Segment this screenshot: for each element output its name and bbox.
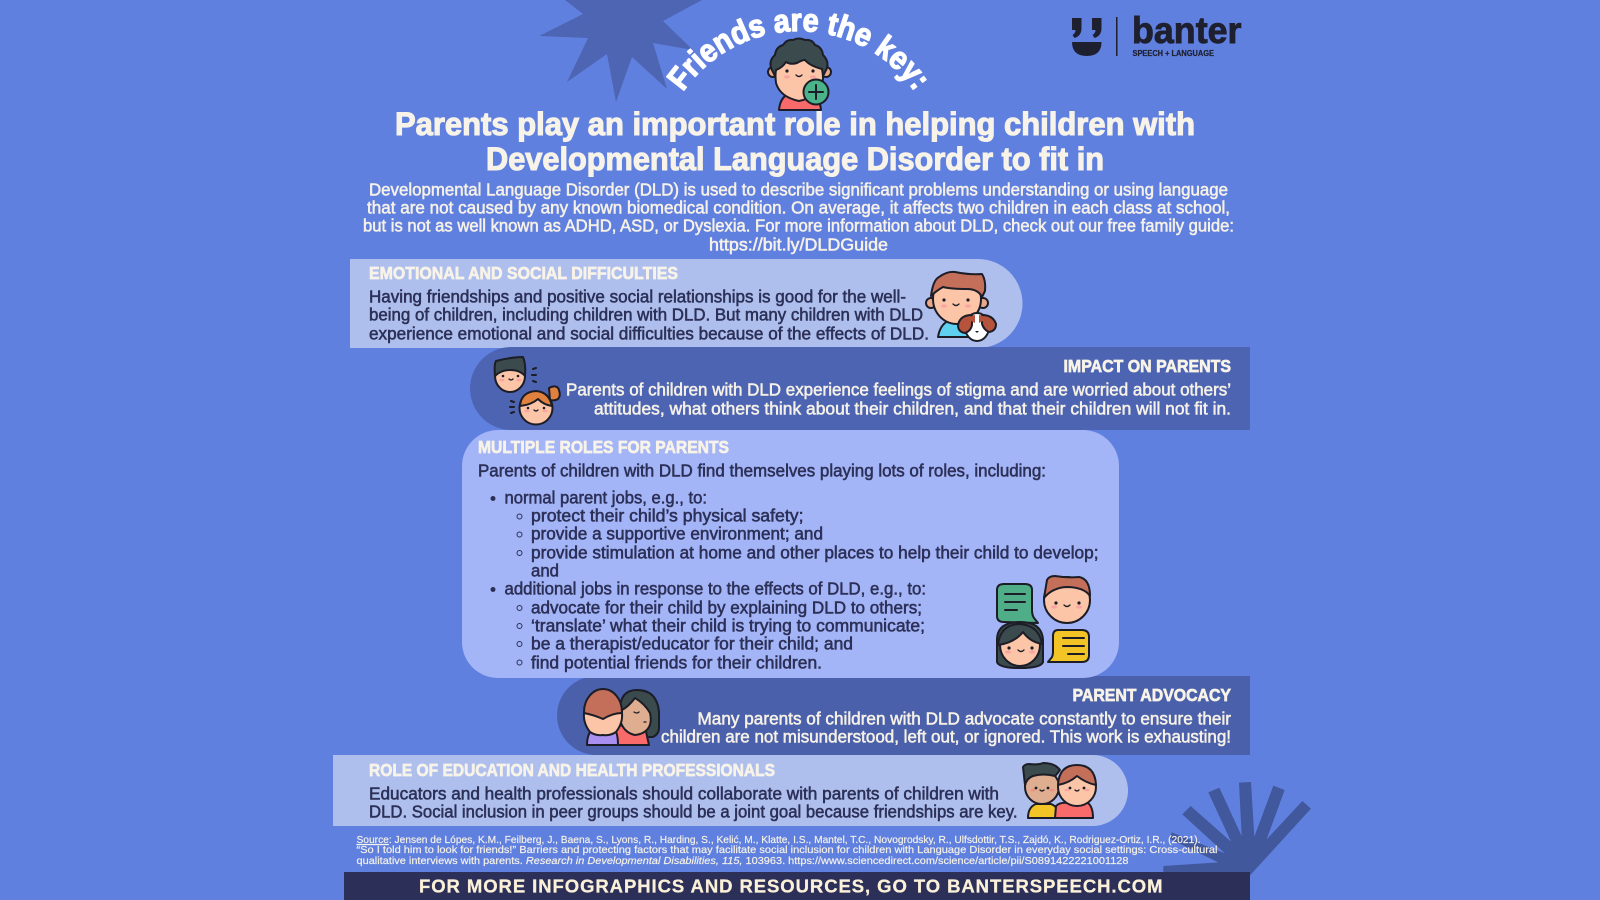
body text: parent advocacy: children are not misunderstood, left out, or ignored. This work is exhausting! bbox=[661, 727, 1231, 747]
bulleted list of parent roles: protect their child’s physical safety; bbox=[531, 506, 804, 526]
bulleted list of parent roles: provide stimulation at home and other places to help their child to develop; bbox=[531, 543, 1098, 563]
intro paragraph: but is not as well known as ADHD, ASD, or Dyslexia. For more information about DLD, check out our free family guide: bbox=[363, 216, 1234, 236]
body text: impact on parents bbox=[566, 380, 1231, 419]
banter logo: banter bbox=[1132, 10, 1242, 51]
banter logo: SPEECH + LANGUAGE bbox=[1132, 49, 1215, 58]
body text: impact on parents: attitudes, what others think about their children, and that their children will not fit in. bbox=[594, 399, 1231, 419]
heading: impact on parents: IMPACT ON PARENTS bbox=[1064, 356, 1231, 376]
heading: role of education and health professionals: ROLE OF EDUCATION AND HEALTH PROFESSIONALS bbox=[369, 760, 775, 780]
decorative fan shape bbox=[1163, 782, 1311, 875]
source citation bbox=[356, 834, 1218, 867]
icon: parent hugging child bbox=[584, 689, 659, 745]
body text: emotional and social difficulties: experience emotional and social difficulties because of the effects of DLD. bbox=[369, 324, 929, 344]
main heading: Developmental Language Disorder to fit in bbox=[486, 141, 1104, 177]
body text: role of professionals: DLD. Social inclusion in peer groups should be a joint goal because friendships are key. bbox=[369, 802, 1018, 822]
heading: parent advocacy: PARENT ADVOCACY bbox=[1072, 685, 1231, 705]
footer banner bbox=[344, 872, 1250, 900]
decorative star shape bbox=[539, 0, 702, 102]
intro line: multiple roles: Parents of children with DLD find themselves playing lots of roles, including: bbox=[478, 461, 1046, 481]
footer banner: FOR MORE INFOGRAPHICS AND RESOURCES, GO TO BANTERSPEECH.COM bbox=[419, 876, 1162, 896]
bulleted list of parent roles: provide a supportive environment; and bbox=[531, 524, 823, 544]
source citation: Source: Jensen de Lópes, K.M., Feilberg, J., Baena, S., Lyons, R., Harding, S., Kelić, M., Klatte, I.S., Mantel, T.C., Novogrodsky, R., Ulfsdottir, T.S., Zajdó, K., Rodriguez-Ortiz, I.R., (2021). bbox=[356, 834, 1200, 846]
intro paragraph: https://bit.ly/DLDGuide bbox=[709, 235, 888, 255]
heading: emotional and social difficulties: EMOTIONAL AND SOCIAL DIFFICULTIES bbox=[369, 263, 678, 283]
bulleted list of parent roles: normal parent jobs, e.g., to: bbox=[504, 488, 707, 508]
bulleted list of parent roles: and bbox=[531, 561, 559, 581]
body text: role of professionals bbox=[369, 784, 1018, 822]
curved title: Friends are the key: Friends are the key: bbox=[666, 13, 927, 91]
panel: parent advocacy bbox=[557, 676, 1250, 755]
body text: emotional and social difficulties: being of children, including children with DLD. But many children with DLD bbox=[369, 305, 923, 325]
source citation: “So I told him to look for friends!” Barriers and protecting factors that may facilitate social inclusion for children with Language Disorder in everyday social settings: Cross-cultural bbox=[356, 844, 1218, 856]
bulleted list of parent roles: advocate for their child by explaining DLD to others; bbox=[531, 598, 922, 618]
icon: two smiling children bbox=[1023, 763, 1096, 818]
bulleted list of parent roles: be a therapist/educator for their child; and bbox=[531, 634, 853, 654]
icon: boy with dog bbox=[926, 272, 996, 341]
heading: multiple roles for parents: MULTIPLE ROLES FOR PARENTS bbox=[478, 437, 729, 457]
intro paragraph bbox=[363, 180, 1234, 255]
panel: impact on parents bbox=[470, 347, 1250, 430]
icon: speech bubbles and two faces bbox=[997, 576, 1090, 668]
body text: parent advocacy bbox=[661, 709, 1231, 747]
body text: impact on parents: Parents of children with DLD experience feelings of stigma and are worried about others’ bbox=[566, 380, 1231, 400]
banter logo bbox=[1072, 10, 1242, 58]
body text: emotional and social difficulties bbox=[369, 287, 929, 344]
body text: emotional and social difficulties: Having friendships and positive social relationships is good for the well- bbox=[369, 287, 906, 307]
main heading: Parents play an important role in helping children with bbox=[395, 106, 1195, 142]
intro paragraph: Developmental Language Disorder (DLD) is used to describe significant problems understanding or using language bbox=[369, 180, 1228, 200]
source citation: qualitative interviews with parents. Research in Developmental Disabilities, 115, 103963. https://www.sciencedirect.com/science/article/pii/S0891422221001128 bbox=[356, 855, 1129, 867]
bulleted list of parent roles bbox=[490, 488, 1098, 673]
icon: two children talking bbox=[495, 357, 560, 424]
panel: role of education and health professionals bbox=[333, 755, 1128, 826]
bulleted list of parent roles: additional jobs in response to the effects of DLD, e.g., to: bbox=[504, 579, 926, 599]
main heading bbox=[395, 106, 1195, 177]
body text: role of professionals: Educators and health professionals should collaborate with parents of children with bbox=[369, 784, 999, 804]
body text: parent advocacy: Many parents of children with DLD advocate constantly to ensure their bbox=[698, 709, 1231, 729]
panel: emotional and social difficulties bbox=[350, 259, 1022, 348]
panel: multiple roles for parents bbox=[462, 430, 1119, 678]
icon: child with plus badge bbox=[768, 38, 831, 110]
bulleted list of parent roles: ‘translate’ what their child is trying to communicate; bbox=[531, 616, 925, 636]
bulleted list of parent roles: find potential friends for their children. bbox=[531, 653, 822, 673]
intro paragraph: that are not caused by any known biomedical condition. On average, it affects two children in each class at school, bbox=[367, 198, 1230, 218]
